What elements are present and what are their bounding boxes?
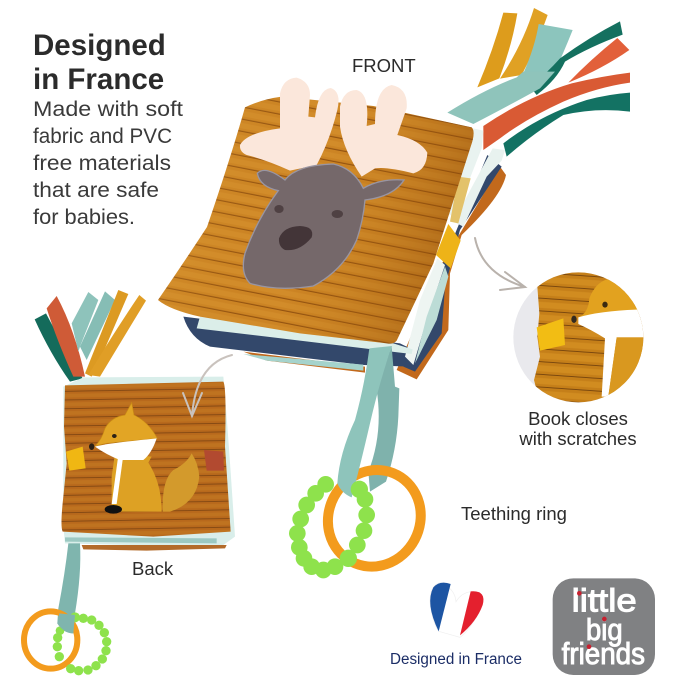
yellow tab	[537, 318, 565, 351]
orange ring	[24, 611, 77, 669]
tagline: Designed in France	[390, 651, 522, 668]
label: Teething ring: Teething ring	[461, 503, 567, 524]
head	[95, 403, 157, 446]
navy inner pages	[183, 317, 413, 367]
chest	[112, 455, 123, 504]
yellow tab	[66, 447, 86, 471]
heading: Designed in France	[33, 29, 166, 96]
back strap	[368, 347, 399, 492]
book: front with moose	[158, 78, 506, 379]
heading: Designed in France: Designed	[33, 29, 166, 62]
flag heart	[430, 583, 483, 637]
logo: little big friends: little	[572, 583, 637, 619]
arrow: towards back book	[183, 355, 232, 416]
corduroy detail	[534, 270, 647, 403]
antlers	[240, 78, 427, 177]
front strap	[337, 346, 392, 497]
strap and teething rings: front	[289, 346, 438, 583]
text block: description: fabric and PVC	[33, 124, 172, 148]
label: Book closes with scratches: Book closes	[528, 408, 628, 429]
fox fabric detail	[580, 280, 638, 317]
moose head	[243, 164, 404, 288]
text block: description: Made with soft	[33, 97, 183, 121]
book: back with fox	[24, 290, 235, 675]
white inner pages	[447, 128, 483, 217]
arrow: front book to detail circle	[475, 238, 525, 290]
label: Book closes with scratches	[518, 408, 637, 449]
green ring	[53, 612, 111, 675]
label: FRONT: FRONT	[352, 55, 416, 76]
red tab	[204, 450, 224, 471]
logo: little big friends: friends	[562, 637, 645, 671]
mint pages	[63, 377, 235, 547]
cover: corduroy	[158, 97, 474, 344]
text block: description	[33, 97, 183, 229]
text block: description: free materials	[33, 151, 171, 175]
logo: little big friends	[553, 578, 655, 675]
green beaded ring	[289, 476, 375, 578]
label: Back: Back	[132, 558, 174, 579]
strap	[57, 543, 80, 633]
ribbons	[35, 290, 146, 382]
yellow closure tab	[436, 224, 461, 268]
body	[112, 453, 162, 513]
ribbons: front book tassels	[447, 8, 630, 157]
corduroy cover	[61, 382, 231, 537]
logo: little big friends: big	[586, 613, 623, 647]
text block: description: that are safe	[33, 178, 159, 202]
detail circle: closure	[513, 270, 647, 403]
tail	[163, 453, 199, 512]
heading: Designed in France: in France	[33, 63, 164, 96]
text block: description: for babies.	[33, 205, 135, 229]
logo: French flag heart with tagline	[390, 583, 522, 668]
back cover edge	[397, 167, 506, 379]
orange ring	[311, 454, 438, 583]
fox	[89, 403, 199, 514]
label: Book closes with scratches: with scratches	[518, 428, 637, 449]
